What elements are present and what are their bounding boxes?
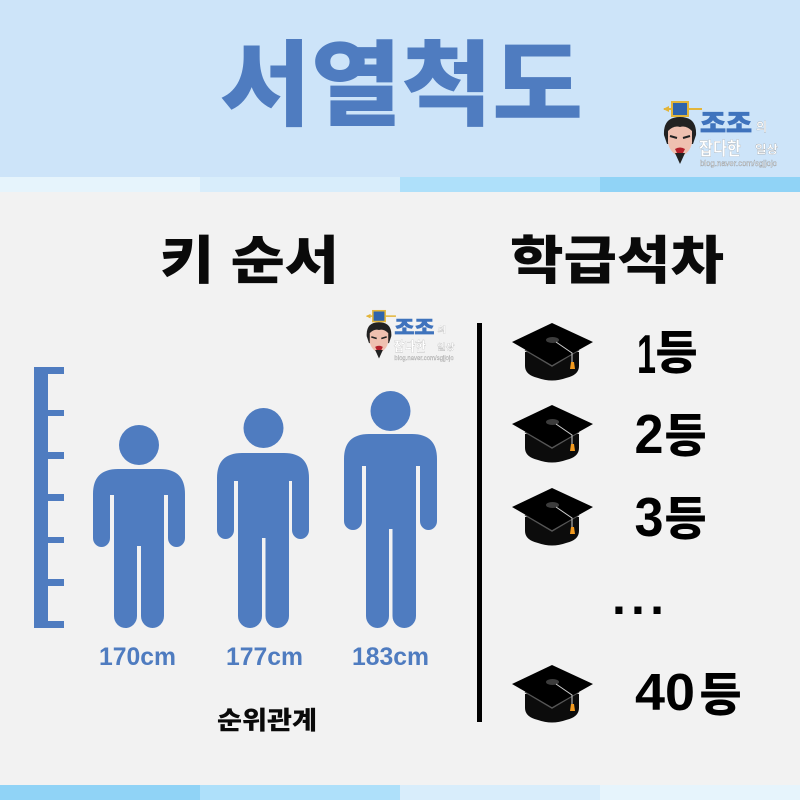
label: rank 1: 1 xyxy=(637,323,656,385)
logo: top right: 잡다한 xyxy=(699,139,741,159)
label: rank 40 xyxy=(635,664,742,722)
label: rank 2 xyxy=(634,403,706,465)
person: 177cm xyxy=(217,408,309,628)
caption: ordinal relation: 순위관계 xyxy=(217,707,317,735)
logo: middle: 잡다한 xyxy=(394,339,426,355)
heading: class rank: 학급석차 xyxy=(510,233,724,291)
height ruler xyxy=(34,367,64,628)
icon: graduation cap 4 xyxy=(512,665,593,722)
header band xyxy=(0,0,800,192)
label: rank 1: 등 xyxy=(656,327,698,379)
title: 서열척도 xyxy=(220,34,583,138)
logo: middle xyxy=(366,311,455,362)
icon: graduation cap 2 xyxy=(512,405,593,462)
label: rank 1 xyxy=(637,323,698,385)
heading: height order: 키 순서 xyxy=(160,233,339,291)
label: rank 3: 등 xyxy=(664,493,706,545)
label: rank 2: 2 xyxy=(634,403,664,465)
logo: top right: 조조 xyxy=(700,110,752,138)
label: rank 40: 등 xyxy=(700,669,742,721)
label: rank 2: 등 xyxy=(664,410,706,462)
ellipsis: ... xyxy=(612,569,664,625)
label: rank 3 xyxy=(634,486,706,548)
logo: top right: 일상 xyxy=(755,142,778,156)
logo: top right: blog.naver.com/sgjjojo xyxy=(700,159,778,168)
footer band xyxy=(0,785,800,800)
person: 170cm xyxy=(93,425,185,628)
logo: middle: 의 xyxy=(438,325,446,335)
label: 183cm: 183cm xyxy=(352,643,429,671)
person: 183cm xyxy=(344,391,437,628)
label: rank 3: 3 xyxy=(634,486,664,548)
divider line xyxy=(477,323,482,722)
icon: graduation cap 3 xyxy=(512,488,593,546)
logo: middle: 일상 xyxy=(437,342,455,352)
logo: top right xyxy=(663,102,778,168)
icon: graduation cap 1 xyxy=(512,323,593,380)
label: rank 40: 40 xyxy=(635,664,695,722)
label: 177cm: 177cm xyxy=(226,643,303,671)
logo: middle: 조조 xyxy=(394,318,435,339)
label: 170cm: 170cm xyxy=(99,643,176,671)
logo: middle: blog.naver.com/sgjjojo xyxy=(394,355,454,362)
logo: top right: 의 xyxy=(756,120,767,134)
